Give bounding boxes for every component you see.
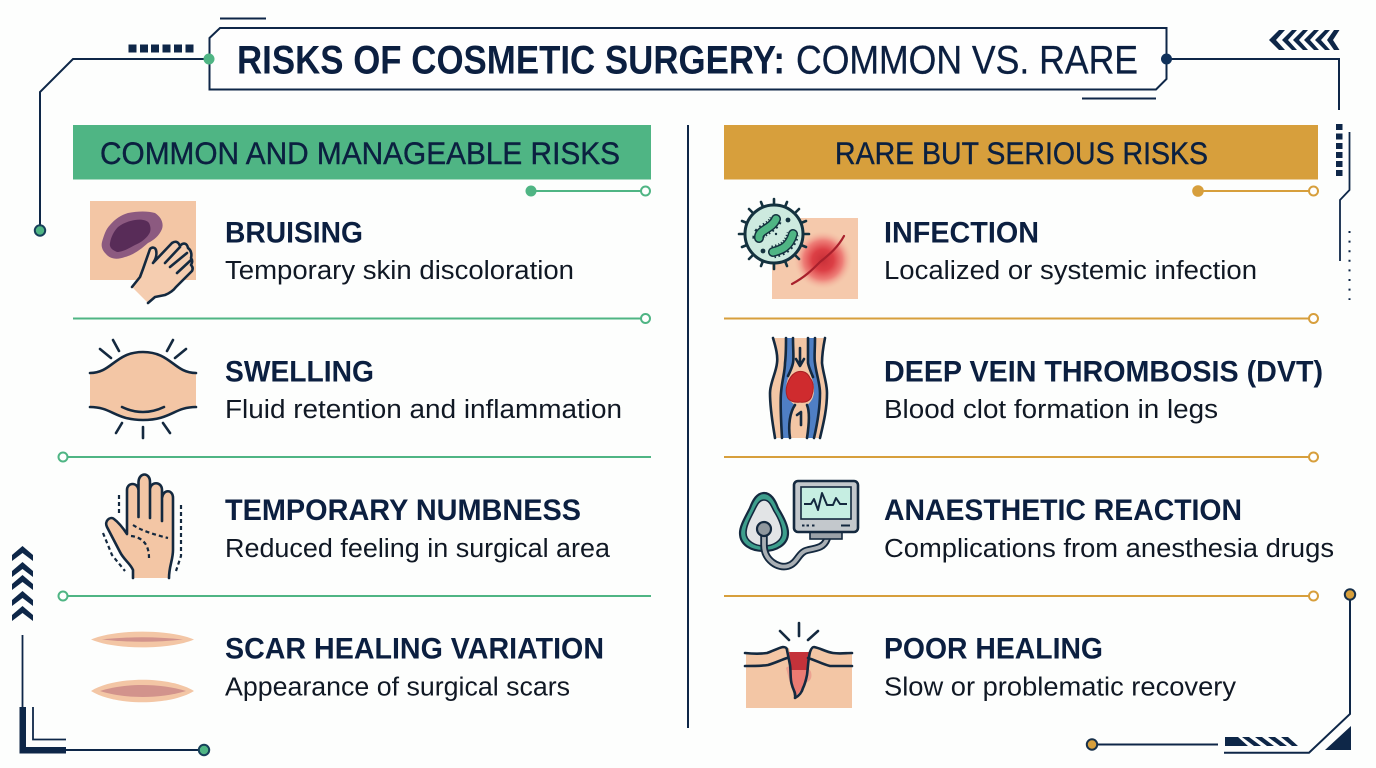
icon: blood clot in vein <box>770 338 827 438</box>
heading: temporary numbness: TEMPORARY NUMBNESS <box>225 494 581 527</box>
heading: deep vein thrombosis: DEEP VEIN THROMBOSIS (DVT) <box>884 356 1323 388</box>
top right connector <box>1161 30 1340 110</box>
risk: temporary numbness <box>103 474 611 578</box>
risk: scar healing variation <box>91 632 604 702</box>
heading: bruising: BRUISING <box>225 216 363 250</box>
heading: poor healing: POOR HEALING <box>884 632 1103 666</box>
icon: open wound <box>745 623 852 708</box>
icon: swollen skin <box>90 340 196 438</box>
heading: infection: INFECTION <box>884 216 1039 250</box>
description: scar healing variation: Appearance of surgical scars <box>225 674 570 702</box>
description: infection: Localized or systemic infection <box>884 257 1257 285</box>
right side bracket <box>1336 124 1350 300</box>
heading: anaesthetic reaction: ANAESTHETIC REACTION <box>884 494 1242 527</box>
title: RISKS OF COSMETIC SURGERY: <box>237 38 785 82</box>
risk: infection <box>739 199 1257 299</box>
description: bruising: Temporary skin discoloration <box>225 257 574 285</box>
description: swelling: Fluid retention and inflammation <box>225 396 622 424</box>
panel: rare but serious risks <box>724 125 1334 708</box>
heading: swelling: SWELLING <box>225 356 374 388</box>
icon: mask and monitor <box>740 481 858 567</box>
bottom left bracket <box>12 546 209 755</box>
description: deep vein thrombosis: Blood clot formation in legs <box>884 396 1218 424</box>
divider <box>58 452 651 462</box>
title <box>237 38 1138 82</box>
heading: scar healing variation: SCAR HEALING VARIATION <box>225 632 604 666</box>
description: poor healing: Slow or problematic recovery <box>884 674 1236 702</box>
centre divider <box>687 125 689 728</box>
section header: common risks: COMMON AND MANAGEABLE RISKS <box>100 135 620 171</box>
section header: rare risks: RARE BUT SERIOUS RISKS <box>835 135 1208 171</box>
divider <box>724 314 1318 323</box>
divider <box>73 314 650 323</box>
divider <box>58 592 651 600</box>
description: anaesthetic reaction: Complications from anesthesia drugs <box>884 535 1334 563</box>
icon: numb hand <box>103 474 181 578</box>
icon: scars <box>91 632 194 702</box>
title: COMMON VS. RARE <box>796 38 1138 82</box>
divider <box>724 452 1318 462</box>
divider <box>724 592 1318 600</box>
title frame <box>210 18 1166 98</box>
top left connector <box>35 44 214 236</box>
description: temporary numbness: Reduced feeling in surgical area <box>225 535 611 563</box>
section header: rare risks <box>724 125 1318 197</box>
risk: anaesthetic reaction <box>740 481 1334 567</box>
section header: common risks <box>73 125 651 196</box>
icon: bacteria and wound <box>739 199 858 299</box>
risk: swelling <box>90 340 622 438</box>
risk: deep vein thrombosis <box>770 338 1323 438</box>
icon: bruise and hand <box>90 201 196 303</box>
panel: common and manageable risks <box>58 125 651 702</box>
risk: bruising <box>90 201 574 303</box>
risk: poor healing <box>745 623 1236 708</box>
bottom right bracket <box>1087 589 1355 753</box>
